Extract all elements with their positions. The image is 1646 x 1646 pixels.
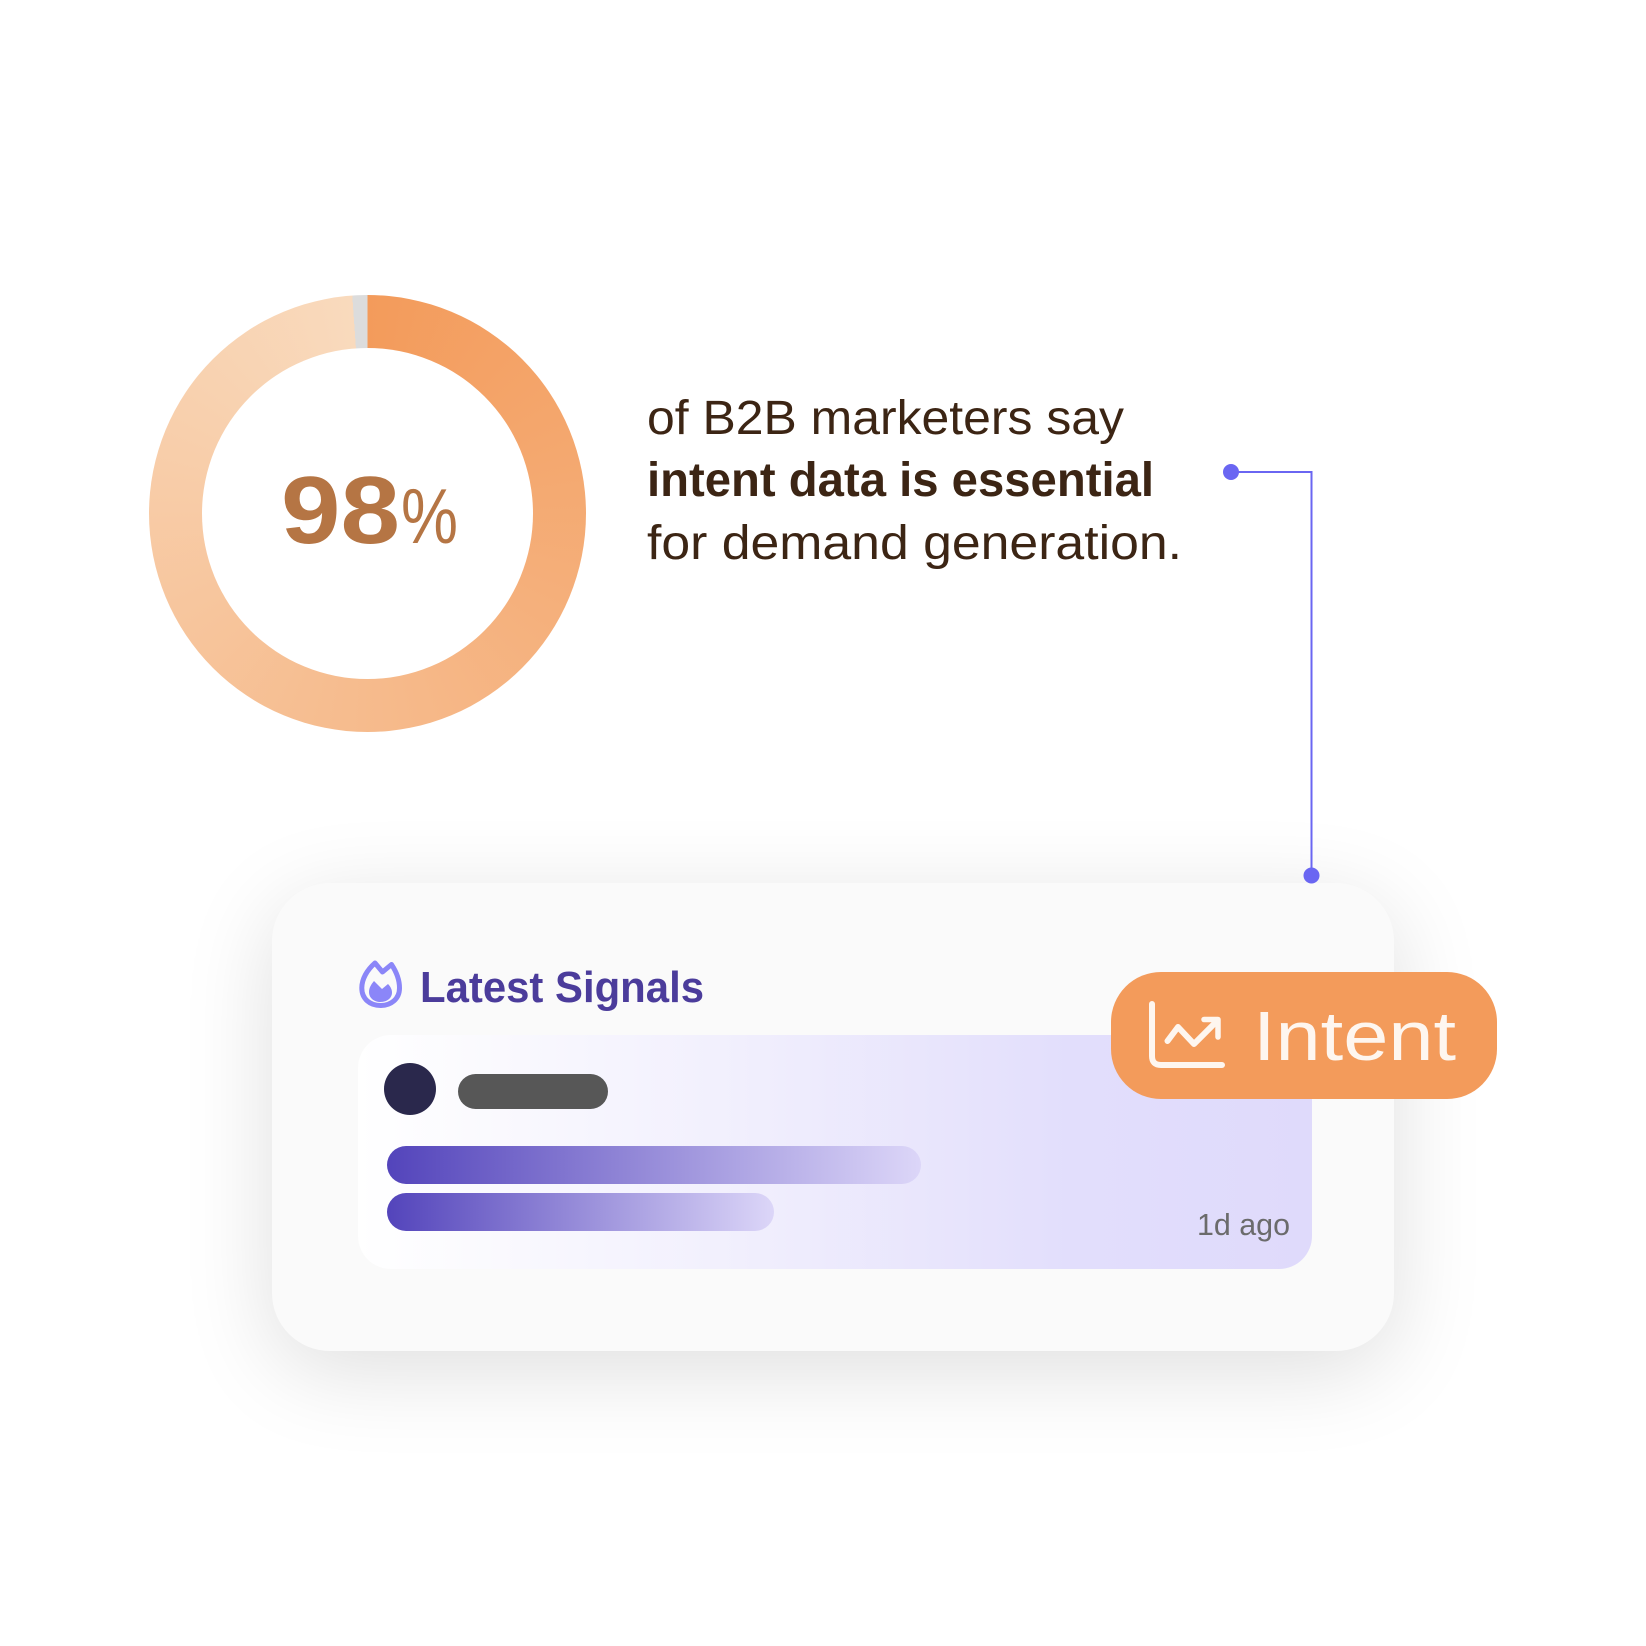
icon: trend chart (1152, 1004, 1222, 1065)
heading: Latest Signals: Latest Signals (420, 963, 704, 1012)
icon: flame (362, 963, 400, 1006)
statement text: intent data is essential (647, 454, 1154, 507)
content placeholder bar 1 (387, 1146, 921, 1184)
statement text: for demand generation. (647, 517, 1182, 570)
timestamp: 1d ago: 1d ago (1197, 1207, 1290, 1242)
stat: 98 percent: % (401, 472, 458, 560)
donut hole (202, 348, 532, 678)
badge: Intent (1111, 972, 1497, 1099)
stat: 98 percent: 98 (281, 457, 400, 564)
name placeholder pill (458, 1074, 608, 1108)
avatar circle (384, 1063, 436, 1115)
connector line with end dots (1223, 464, 1320, 884)
statement text: of B2B marketers say (647, 392, 1124, 445)
statement text (647, 392, 1182, 570)
panel: signals card (272, 883, 1394, 1351)
label: Intent: Intent (1253, 997, 1456, 1075)
stat: 98 percent (281, 457, 458, 564)
content placeholder bar 2 (387, 1193, 774, 1231)
donut chart: 98% (148, 294, 586, 732)
panel: signal row (358, 1035, 1312, 1269)
